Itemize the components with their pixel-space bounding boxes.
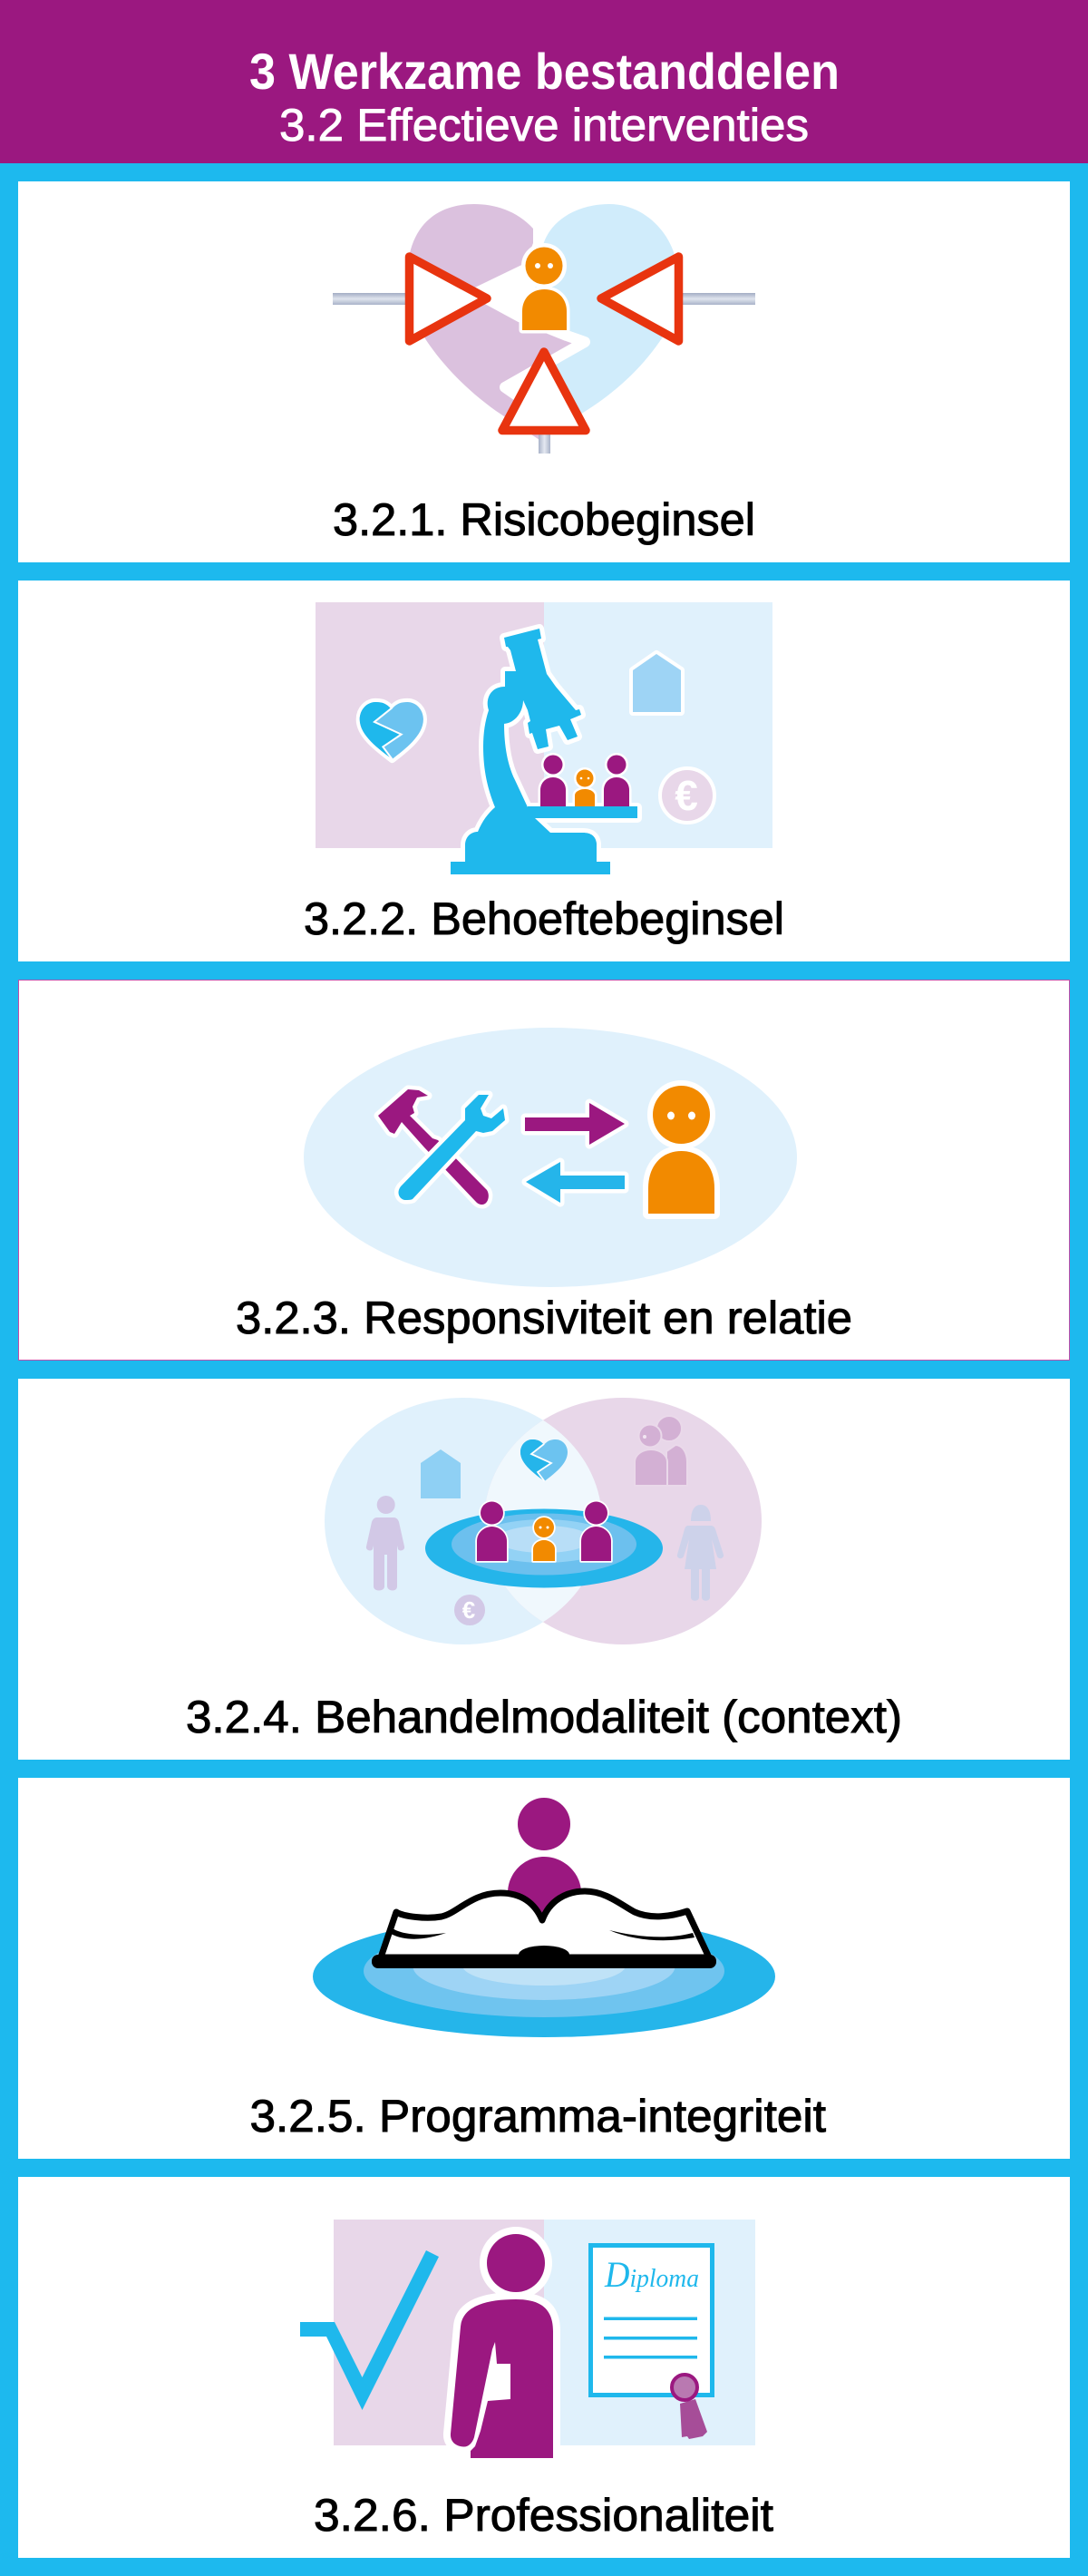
icon: warning triangles [410, 257, 678, 430]
icon: person [508, 1798, 581, 1918]
background split [334, 2220, 755, 2445]
icon: ripple [313, 1916, 775, 2037]
heading: 3.2.6. Professionaliteit [314, 2490, 773, 2541]
panel: 3.2.5 Programma-integriteit [18, 1778, 1070, 2159]
icon: three people on stage [528, 755, 637, 818]
icon: house [421, 1449, 461, 1498]
icon: three people [477, 1502, 611, 1561]
heading: 3.2.5. Programma-integriteit [250, 2091, 826, 2142]
header [0, 0, 1088, 163]
panel: 3.2.2 Behoeftebeginsel [18, 581, 1070, 961]
panel: 3.2.1 Risicobeginsel [18, 181, 1070, 562]
title: 3 Werkzame bestanddelen [249, 43, 840, 100]
background split [316, 602, 772, 848]
venn diagram [325, 1398, 762, 1644]
icon: open book [372, 1891, 716, 1968]
icon: barrier poles [333, 293, 755, 454]
diploma text: Diploma [604, 2254, 699, 2295]
icon: broken heart [520, 1439, 568, 1481]
icon: orange person [522, 247, 567, 330]
icon: checkmark [300, 2250, 439, 2410]
icon: wrench [398, 1095, 505, 1200]
icon: euro coin: € [675, 772, 698, 819]
icon: diploma [591, 2246, 713, 2395]
icon: person with folder [451, 2234, 553, 2458]
heading: 3.2.3. Responsiviteit en relatie [236, 1293, 852, 1343]
arrow: tools to person [525, 1103, 625, 1145]
icon: house [633, 654, 681, 712]
icon: couple [635, 1416, 687, 1486]
icon: man [366, 1496, 404, 1591]
icon: woman [677, 1505, 724, 1601]
icon: orange person [648, 1086, 714, 1214]
panel: 3.2.3 Responsiviteit en relatie [18, 980, 1070, 1361]
icon: hammer [378, 1089, 489, 1205]
subtitle: 3.2 Effectieve interventies [279, 100, 809, 151]
icon: broken heart [408, 204, 677, 440]
icon: seal with ribbon [672, 2375, 707, 2439]
panel: 3.2.6 Professionaliteit [18, 2177, 1070, 2558]
background ellipse [304, 1028, 797, 1287]
heading: 3.2.2. Behoeftebeginsel [304, 893, 784, 944]
heading: 3.2.1. Risicobeginsel [333, 494, 755, 545]
icon: microscope [451, 629, 637, 874]
icon: broken heart [360, 702, 423, 759]
icon: euro coin: € [462, 1596, 475, 1624]
heading: 3.2.4. Behandelmodaliteit (context) [186, 1692, 902, 1742]
icon: euro coin [454, 1595, 485, 1625]
icon: euro coin [662, 770, 713, 821]
arrow: person to tools [526, 1162, 625, 1203]
icon: ripple [425, 1509, 663, 1587]
panel: 3.2.4 Behandelmodaliteit (context) [18, 1379, 1070, 1760]
